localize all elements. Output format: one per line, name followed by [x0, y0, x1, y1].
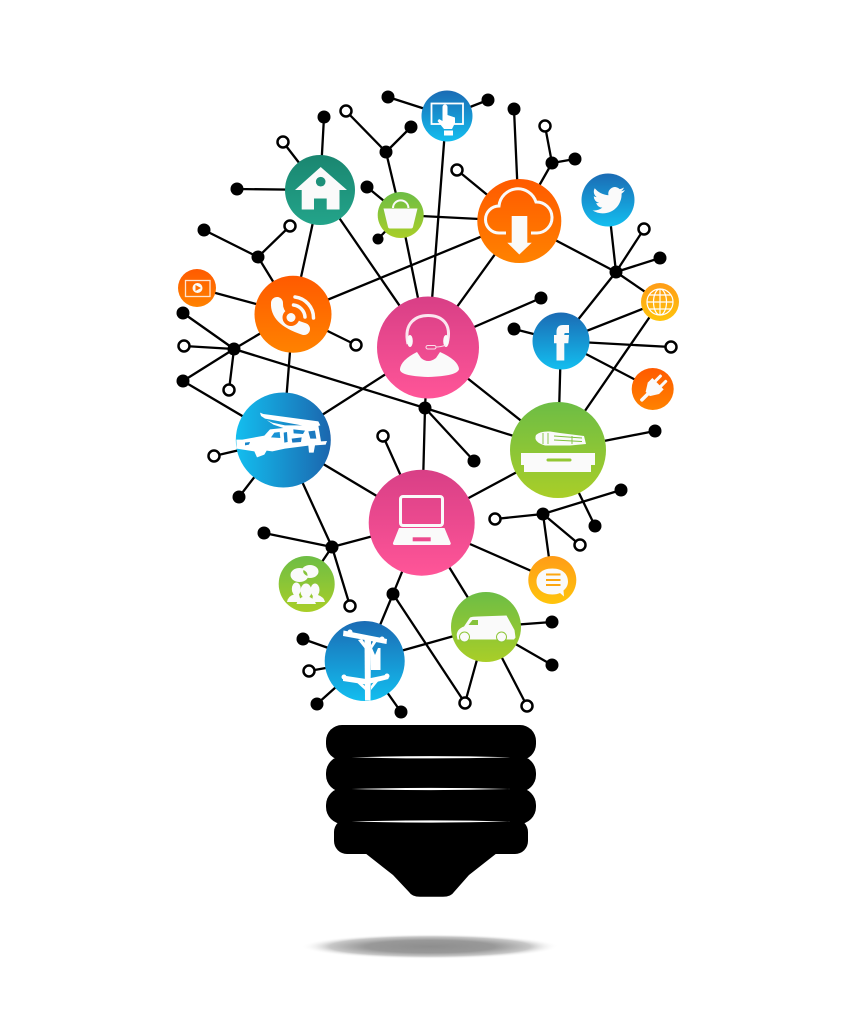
- icon: bucket truck: [236, 392, 331, 488]
- icon: globe: [641, 283, 679, 321]
- icon: discussion group: [279, 556, 335, 612]
- icon: download cloud: [477, 179, 561, 263]
- icon: utility pole: [325, 621, 405, 701]
- icon: laptop: [369, 470, 475, 576]
- icon: shopping bag: [378, 192, 424, 238]
- icon: chat bubble: [528, 556, 576, 604]
- icon: phone with signal: [254, 276, 332, 353]
- network connector lines: [183, 97, 671, 712]
- icon: customer support agent: [377, 296, 479, 398]
- icon: set-top box: [510, 402, 606, 498]
- icon: facebook: [532, 312, 590, 370]
- icon: service van: [451, 592, 521, 662]
- lightbulb screw base: [326, 725, 536, 897]
- icon: home: [285, 155, 355, 225]
- solid black nodes: [176, 90, 666, 718]
- icon: video player: [178, 269, 216, 307]
- icon: power plug: [632, 368, 674, 410]
- hollow nodes: [178, 106, 676, 712]
- ground shadow: [301, 934, 559, 959]
- icon: touch tablet: [422, 90, 472, 142]
- icon: twitter: [582, 174, 634, 226]
